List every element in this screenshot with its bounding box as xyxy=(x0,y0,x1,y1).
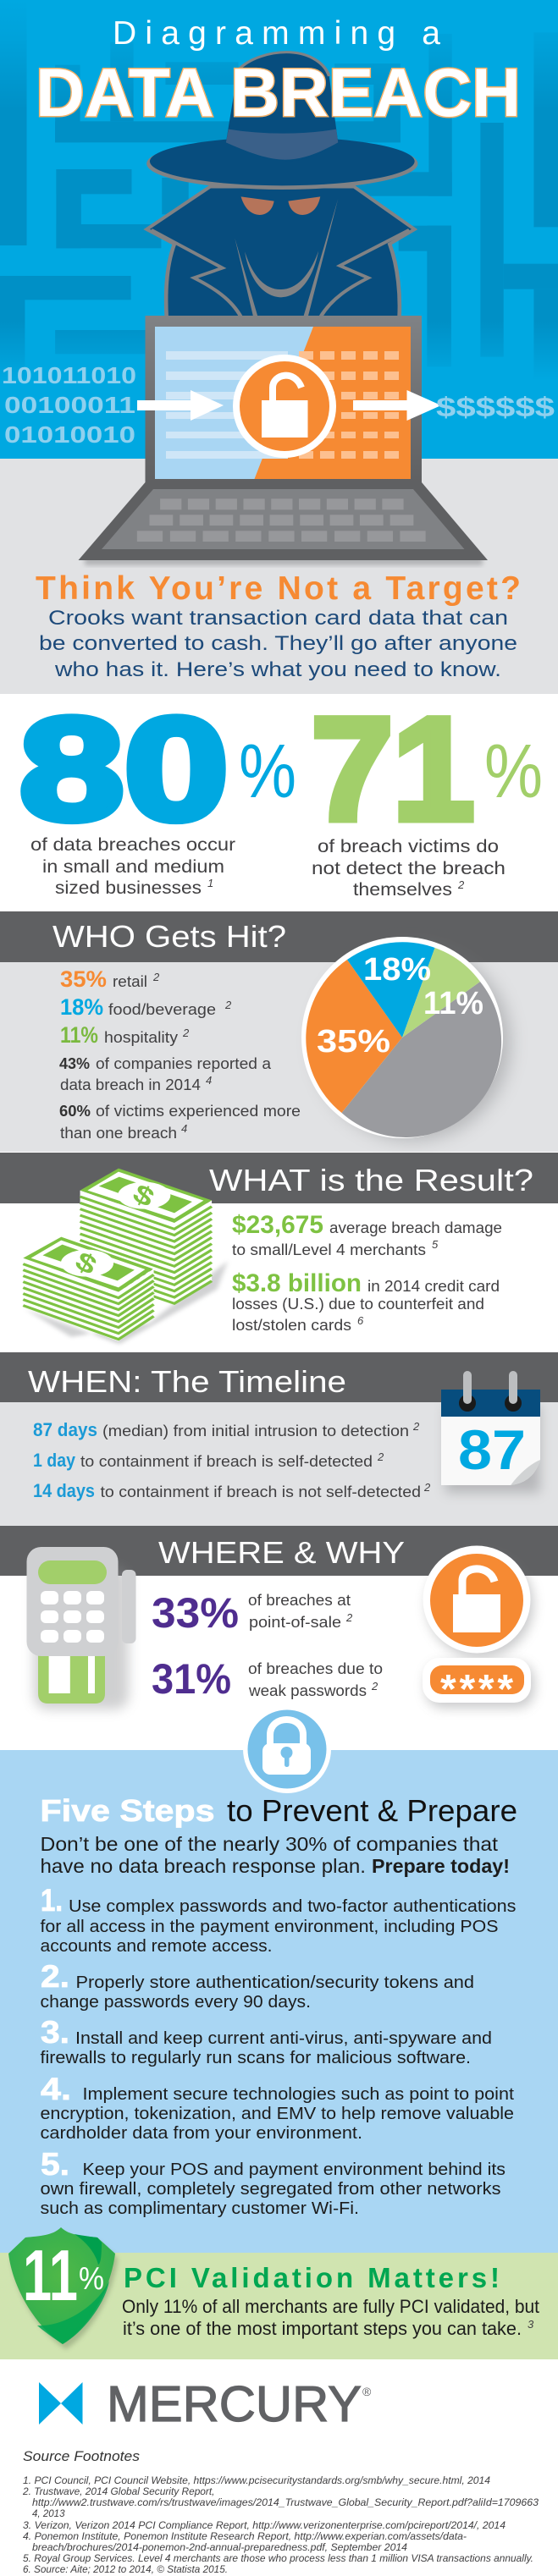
caption: 80%: of data breaches occur xyxy=(30,835,235,855)
step 5 xyxy=(41,2147,506,2218)
icon: stacks of money: $ xyxy=(128,1178,159,1213)
icon: password field: **** xyxy=(440,1667,513,1712)
text: $3.8 billion: $3.8 billion xyxy=(232,1269,362,1297)
text: $3.8 billion: in 2014 credit card xyxy=(367,1278,500,1295)
stat: 33% point-of-sale: of breaches at xyxy=(248,1592,351,1609)
caption: 80% xyxy=(30,835,235,898)
stat: 71%: % xyxy=(484,729,543,814)
stat: 31% weak passwords: of breaches due to xyxy=(248,1660,383,1677)
list: sectors: 2 xyxy=(152,971,160,983)
heading: WHEN: The Timeline: WHEN: The Timeline xyxy=(28,1364,346,1399)
text: crooks intro: be converted to cash. They’ll go after anyone xyxy=(39,632,517,655)
text: crooks intro: Crooks want transaction card data that can xyxy=(48,607,508,630)
text: 43% companies xyxy=(59,1055,272,1093)
text: 87 days xyxy=(33,1419,420,1440)
step 3: firewalls to regularly run scans for malicious software. xyxy=(41,2049,471,2067)
stat: 80%: 80 xyxy=(19,688,229,850)
binary code text xyxy=(2,362,136,448)
text: crooks intro xyxy=(39,607,517,681)
step 1: 1. xyxy=(41,1883,63,1918)
step 4: cardholder data from your environment. xyxy=(41,2124,362,2143)
caption: 80%: sized businesses xyxy=(55,878,202,898)
stat: 80% xyxy=(19,688,296,850)
icon: stacks of money xyxy=(23,1169,228,1344)
pie chart: 11% xyxy=(423,986,483,1021)
caption: 71%: themselves xyxy=(353,880,452,900)
panel: key stats xyxy=(19,688,543,900)
stat: 71%: 71 xyxy=(312,688,474,850)
text: $3.8 billion: lost/stolen cards xyxy=(232,1317,351,1334)
spy eyes xyxy=(241,196,320,215)
step 1: Use complex passwords and two-factor authentications xyxy=(69,1897,517,1916)
text: $3.8 billion: losses (U.S.) due to counterfeit and xyxy=(232,1296,484,1313)
panel: WHO gets hit xyxy=(0,911,558,1152)
text: prepare today: Don’t be one of the nearly 30% of companies that xyxy=(41,1833,499,1855)
text: 1 day xyxy=(33,1450,384,1471)
pie chart: 18% xyxy=(363,952,431,988)
step 1: for all access in the payment environment, including POS xyxy=(41,1918,498,1936)
text: prepare today: have no data breach response plan. xyxy=(41,1855,366,1877)
icon: card terminal xyxy=(27,1547,135,1709)
stat: 31% weak passwords: weak passwords xyxy=(248,1682,367,1699)
step 5: own firewall, completely segregated from other networks xyxy=(41,2180,501,2199)
icon: open padlock on laptop xyxy=(233,355,336,458)
text: 43% companies: 43% xyxy=(59,1055,90,1072)
step 3 xyxy=(41,2015,492,2067)
icon: stacks of money: $ xyxy=(70,1246,102,1280)
stat: 33% point-of-sale: point-of-sale xyxy=(249,1614,341,1631)
text: 60% victims: 4 xyxy=(181,1122,187,1135)
text: 60% victims: of victims experienced more xyxy=(96,1103,301,1120)
step 4: Implement secure technologies such as point to point xyxy=(83,2085,514,2104)
text: 43% companies: of companies reported a xyxy=(96,1055,272,1072)
text: $3.8 billion: 6 xyxy=(357,1314,364,1327)
text: 14 days xyxy=(33,1480,431,1501)
panel: WHEN the timeline xyxy=(0,1352,558,1526)
stat: 33% point-of-sale: 33% xyxy=(152,1589,239,1637)
text: 14 days: 14 days xyxy=(33,1480,95,1501)
icon: open padlock badge xyxy=(423,1545,533,1658)
text: footnotes: 2. Trustwave, 2014 Global Security Report, xyxy=(22,2485,215,2497)
list: sectors: retail xyxy=(113,973,147,990)
keyboard keys xyxy=(137,498,426,542)
text: footnotes xyxy=(22,2474,539,2575)
icon: closed padlock xyxy=(243,1705,331,1793)
text: crooks intro: who has it. Here’s what you need to know. xyxy=(54,658,501,681)
upper stack xyxy=(80,1169,212,1303)
text: prepare today: Prepare today! xyxy=(372,1855,510,1877)
text: $23,675: 5 xyxy=(432,1238,439,1251)
panel: WHAT is the result xyxy=(0,1153,558,1344)
list: sectors xyxy=(60,966,232,1048)
step 2: 2. xyxy=(41,1959,69,1994)
step 5: Keep your POS and payment environment behind its xyxy=(83,2160,506,2179)
panel: WHERE and WHY xyxy=(0,1526,558,1712)
logo: Mercury: MERCURY xyxy=(107,2376,362,2432)
step 4: 4. xyxy=(41,2072,71,2106)
step 2 xyxy=(41,1959,474,2012)
stat: 33% point-of-sale: 2 xyxy=(345,1611,353,1624)
panel: PCI validation xyxy=(0,2227,558,2359)
step 2: Properly store authentication/security tokens and xyxy=(76,1973,474,1992)
heading: Five Steps: to Prevent & Prepare xyxy=(227,1793,517,1828)
arrow: data in xyxy=(137,390,224,421)
text: footnotes: http://www2.trustwave.com/rs/trustwave/images/2014_Trustwave_Global_Security_Report.pdf?aliId=1709663 xyxy=(32,2496,539,2508)
heading: WHERE & WHY: WHERE & WHY xyxy=(158,1535,405,1570)
text: PCI details: it’s one of the most important steps you can take. xyxy=(123,2318,522,2339)
text: footnotes: breach/brochures/2014-ponemon-2nd-annual-preparedness.pdf, September 2014 xyxy=(32,2541,407,2553)
text: 14 days: 2 xyxy=(423,1481,431,1494)
step 5: 5. xyxy=(41,2147,69,2182)
text: 60% victims: than one breach xyxy=(60,1125,177,1142)
pie chart: 35% xyxy=(317,1024,390,1060)
list: sectors: food/beverage xyxy=(108,1001,216,1018)
step 1 xyxy=(41,1883,517,1956)
pie chart xyxy=(301,937,511,1141)
text: PCI details: 3 xyxy=(528,2318,534,2331)
text: 87 days: 2 xyxy=(412,1420,420,1433)
text: 60% victims: 60% xyxy=(59,1103,91,1120)
heading: Five Steps xyxy=(41,1793,517,1828)
heading: WHAT is the Result?: WHAT is the Result? xyxy=(209,1163,533,1197)
text: Diagramming a: Diagramming a xyxy=(113,15,440,52)
text: $3.8 billion xyxy=(232,1269,500,1334)
caption: 71%: of breach victims do xyxy=(318,837,499,856)
stat: 33% point-of-sale xyxy=(152,1589,353,1637)
icon: 11% shield: % xyxy=(79,2261,104,2297)
text: 43% companies: data breach in 2014 xyxy=(60,1076,201,1093)
step 3: Install and keep current anti-virus, anti-spyware and xyxy=(75,2029,492,2048)
text: footnotes: 1. PCI Council, PCI Council Website, https://www.pcisecuritystandards.org/smb/why_secure.html, 2014 xyxy=(23,2474,490,2486)
title: DATA BREACH: DATA BREACH xyxy=(36,55,521,131)
heading: WHO Gets Hit?: WHO Gets Hit? xyxy=(52,919,286,954)
stat: 31% weak passwords: 2 xyxy=(371,1680,378,1693)
text: footnotes: 4. Ponemon Institute, Ponemon Institute Research Report, http://www.experian.com/assets/data- xyxy=(23,2530,467,2542)
caption: 71%: not detect the breach xyxy=(312,859,506,878)
text: PCI details xyxy=(122,2296,539,2339)
binary code text: 101011010 xyxy=(2,362,136,388)
text: footnotes: 4, 2013 xyxy=(32,2507,65,2519)
logo: Mercury: ® xyxy=(362,2385,372,2398)
list: sectors: 2 xyxy=(182,1027,190,1039)
text: 1 day: to containment if breach is self-detected xyxy=(80,1453,373,1470)
text: 14 days: to containment if breach is not self-detected xyxy=(100,1483,421,1500)
list: sectors: 2 xyxy=(224,999,232,1011)
heading: PCI Validation Matters!: PCI Validation Matters! xyxy=(124,2262,500,2293)
list: sectors: hospitality xyxy=(104,1029,178,1046)
text: 87 days: (median) from initial intrusion to detection xyxy=(102,1423,409,1439)
caption: 71% xyxy=(312,837,506,900)
stat: 31% weak passwords xyxy=(152,1655,383,1703)
text: $23,675: average breach damage xyxy=(329,1219,502,1236)
text: prepare today xyxy=(41,1833,510,1877)
caption: 80%: 1 xyxy=(207,877,213,889)
binary code text: 00100011 xyxy=(4,392,135,418)
step 5: such as complimentary customer Wi-Fi. xyxy=(41,2199,359,2218)
text: footnotes: 3. Verizon, Verizon 2014 PCI Compliance Report, http://www.verizonenterprise.com/pcireport/2014/, 2014 xyxy=(23,2519,506,2531)
list: sectors: 11% xyxy=(60,1022,98,1048)
icon: 11% shield xyxy=(8,2227,118,2349)
step 4 xyxy=(41,2072,514,2143)
step 2: change passwords every 90 days. xyxy=(41,1993,311,2012)
panel: hero xyxy=(0,0,558,459)
text: 87 days: 87 days xyxy=(33,1419,97,1440)
step 1: accounts and remote access. xyxy=(41,1937,273,1956)
text: 1 day: 1 day xyxy=(33,1450,76,1471)
stat: 80%: % xyxy=(239,729,296,814)
text: $23,675: to small/Level 4 merchants xyxy=(232,1241,426,1258)
icon: laptop xyxy=(78,316,488,565)
text: $23,675: $23,675 xyxy=(232,1211,323,1239)
arrow: cash out xyxy=(353,390,441,421)
icon: 11% shield: 11 xyxy=(23,2236,78,2316)
stat: 31% weak passwords: 31% xyxy=(152,1655,231,1703)
spy coat xyxy=(146,187,415,317)
panel: five steps xyxy=(0,1705,558,2253)
spy hat xyxy=(146,52,417,190)
text: 43% companies: 4 xyxy=(206,1074,212,1087)
text: $23,675 xyxy=(232,1211,502,1258)
list: sectors: 35% xyxy=(60,966,107,992)
icon: hooded spy xyxy=(146,52,417,317)
text: 60% victims xyxy=(59,1103,301,1142)
list: sectors: 18% xyxy=(60,994,103,1020)
caption: 80%: in small and medium xyxy=(42,857,224,877)
maze background pattern xyxy=(0,0,558,381)
binary code text: 01010010 xyxy=(4,421,135,448)
heading: Source Footnotes: Source Footnotes xyxy=(23,2448,141,2464)
icon: calendar xyxy=(441,1371,540,1493)
icon: password field xyxy=(423,1658,534,1712)
text: footnotes: 6. Source: Aite; 2012 to 2014, © Statista 2015. xyxy=(23,2563,228,2575)
lower stack xyxy=(23,1237,154,1341)
heading: Think You're Not a Target?: Think You’re Not a Target? xyxy=(36,570,521,607)
step 3: 3. xyxy=(41,2015,69,2050)
heading: Five Steps: Five Steps xyxy=(41,1793,215,1828)
step 4: encryption, tokenization, and EMV to help remove valuable xyxy=(41,2105,514,2123)
icon: calendar: 87 xyxy=(458,1418,526,1481)
panel: think you're not a target xyxy=(0,316,558,694)
caption: 71%: 2 xyxy=(457,878,465,891)
dollar signs text: $$$$$$ xyxy=(436,392,555,422)
text: 1 day: 2 xyxy=(377,1450,384,1463)
text: PCI details: Only 11% of all merchants are fully PCI validated, but xyxy=(122,2296,539,2317)
text: footnotes: 5. Royal Group Services. Level 4 merchants are those who process less than 1 million VISA transactions annually. xyxy=(23,2552,533,2564)
